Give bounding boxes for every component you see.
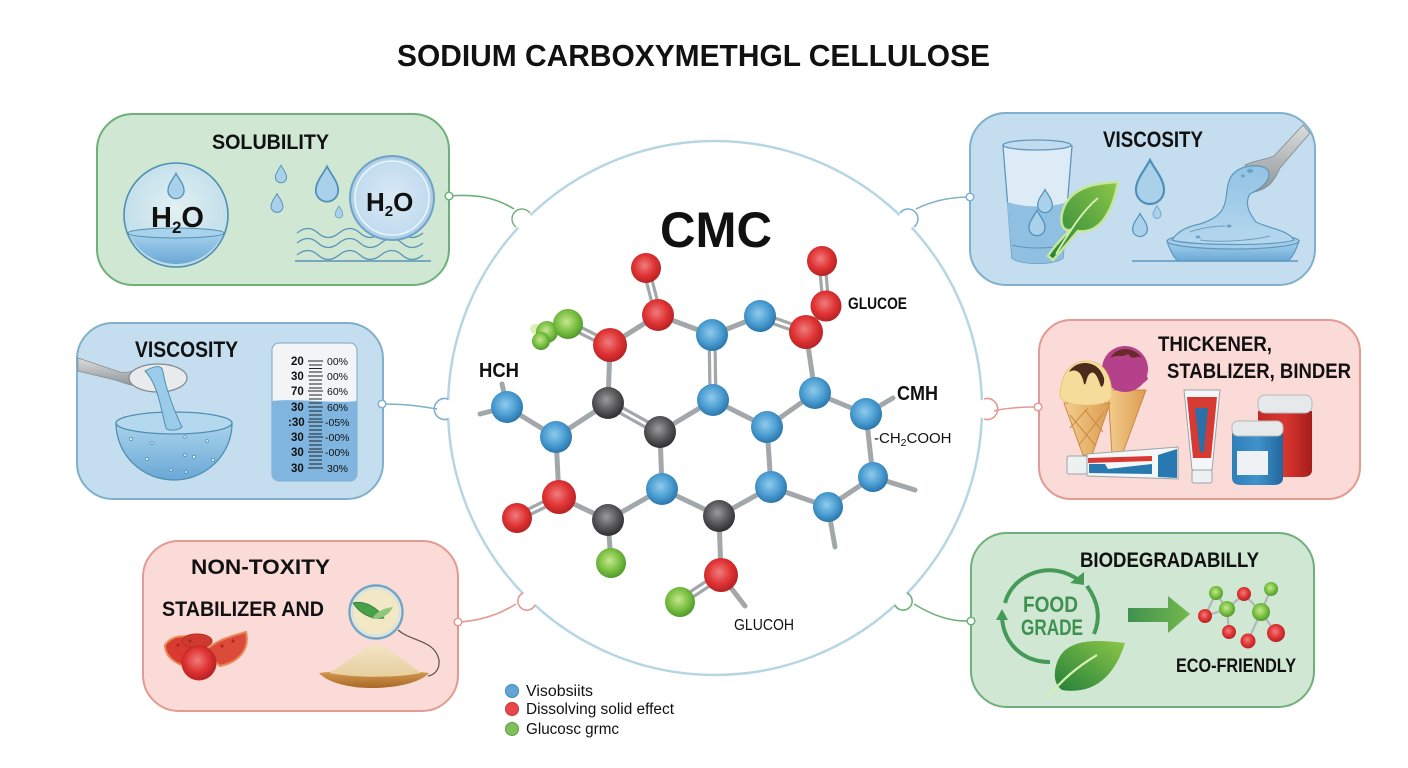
panel: thickener, stabilizer, binder	[1034, 320, 1360, 499]
gauge chart: 70	[291, 386, 304, 398]
molecule label: CMH: CMH	[897, 383, 938, 405]
gauge chart: 30	[291, 432, 304, 444]
legend: Dissolving solid effect	[526, 701, 675, 718]
arrow	[1128, 596, 1190, 633]
central circle	[448, 141, 982, 675]
icon: H2O water sphere: 2	[172, 218, 181, 237]
icon: H2O bubble	[350, 156, 434, 240]
icon: magnified leaf	[350, 586, 439, 676]
icon: water glass	[1003, 140, 1072, 263]
molecule label: GLUCOE: GLUCOE	[848, 294, 907, 313]
biodegradability heading: BIODEGRADABILLY	[1080, 549, 1259, 572]
icon: H2O water sphere: H	[151, 202, 172, 234]
connector dot	[445, 192, 453, 200]
icon: H2O bubble: O	[393, 187, 413, 217]
gauge chart: -00%	[325, 432, 350, 444]
connector: biodegradability	[893, 591, 971, 621]
right viscosity heading: VISCOSITY	[1103, 127, 1203, 152]
molecule label: GLUCOH: GLUCOH	[734, 617, 794, 634]
title: SODIUM CARBOXYMETHGL CELLULOSE	[397, 38, 990, 73]
left viscosity heading: VISCOSITY	[135, 337, 238, 362]
icon: tomato slices	[165, 632, 247, 680]
CMC heading: CMC	[660, 202, 772, 258]
legend: Glucosc grmc	[526, 721, 619, 738]
bonds	[480, 261, 915, 606]
connector: left viscosity	[382, 398, 456, 420]
icon: spoon	[78, 358, 187, 392]
icon: H2O water sphere: O	[181, 202, 204, 234]
icon: ice cream cones	[1060, 346, 1148, 455]
non-toxicity heading: NON-TOXITY	[191, 556, 330, 579]
connector dot	[378, 400, 386, 408]
icon: spoon with gel in bowl	[1132, 125, 1310, 261]
icon: H2O water sphere	[124, 163, 228, 267]
molecule diagram	[480, 246, 915, 617]
icon: H2O bubble: H	[366, 187, 385, 217]
icon: H2O bubble: 2	[385, 203, 393, 220]
connector: non-toxicity	[458, 591, 537, 622]
connector dot	[454, 618, 462, 626]
food grade badge: GRADE	[1021, 615, 1083, 640]
food grade badge	[996, 570, 1098, 662]
stabilizer heading: STABILIZER AND	[162, 598, 324, 621]
icon: green leaf	[1048, 182, 1118, 260]
molecule label: CH2COOH: 2	[901, 437, 907, 449]
icon: leaf	[1048, 641, 1125, 697]
icon: falling droplets	[271, 165, 343, 218]
panel: right viscosity	[966, 113, 1315, 285]
gauge chart: :30	[288, 417, 305, 429]
gauge chart: -00%	[325, 447, 350, 459]
eco-friendly label: ECO-FRIENDLY	[1176, 656, 1296, 677]
icon: water waves	[295, 228, 431, 261]
icon: powder on a dish	[319, 643, 429, 688]
gauge chart	[272, 343, 357, 481]
molecule label: HCH: HCH	[479, 360, 519, 382]
gauge chart: 30	[291, 447, 304, 459]
legend	[506, 683, 675, 738]
icon: vertical tube	[1184, 390, 1220, 483]
icon: bowl of liquid	[116, 367, 232, 480]
icon: red jar	[1258, 395, 1312, 477]
solubility heading: SOLUBILITY	[212, 131, 329, 154]
connector dot	[967, 617, 975, 625]
molecule label: CH2COOH: -CH	[874, 430, 901, 447]
dark atoms	[592, 387, 735, 536]
gauge chart: 60%	[327, 386, 348, 398]
thickener heading: THICKENER,	[1158, 333, 1272, 356]
gauge chart: 30%	[327, 463, 348, 475]
connector: solubility	[449, 195, 532, 229]
molecule label: CH2COOH: COOH	[907, 430, 952, 447]
connector dot	[1034, 403, 1042, 411]
gauge chart: 60%	[327, 402, 348, 414]
stabilizer binder heading: STABLIZER, BINDER	[1167, 360, 1351, 383]
panel: non-toxicity	[143, 541, 462, 711]
green atoms	[530, 309, 695, 617]
panel: biodegradability	[967, 533, 1314, 707]
gauge chart: 30	[291, 402, 304, 414]
connector: right viscosity	[898, 197, 970, 229]
icon: horizontal tube	[1067, 447, 1178, 479]
icon: small molecule	[1198, 582, 1285, 648]
legend: Visobsiits	[526, 683, 593, 700]
icon: droplets	[1133, 160, 1164, 237]
gauge chart: 00%	[327, 371, 348, 383]
food grade badge: FOOD	[1023, 592, 1078, 617]
gauge chart: 30	[291, 463, 304, 475]
blue atoms	[491, 300, 888, 522]
gauge chart: -05%	[325, 417, 350, 429]
panel: solubility	[97, 114, 453, 285]
gauge chart: 20	[291, 356, 304, 368]
connector dot	[966, 193, 974, 201]
gauge chart: 30	[291, 371, 304, 383]
gauge chart: 00%	[327, 356, 348, 368]
icon: blue jar	[1232, 421, 1283, 485]
red atoms	[502, 246, 842, 592]
connector: thickener	[974, 398, 1038, 420]
panel: left viscosity	[77, 323, 386, 499]
